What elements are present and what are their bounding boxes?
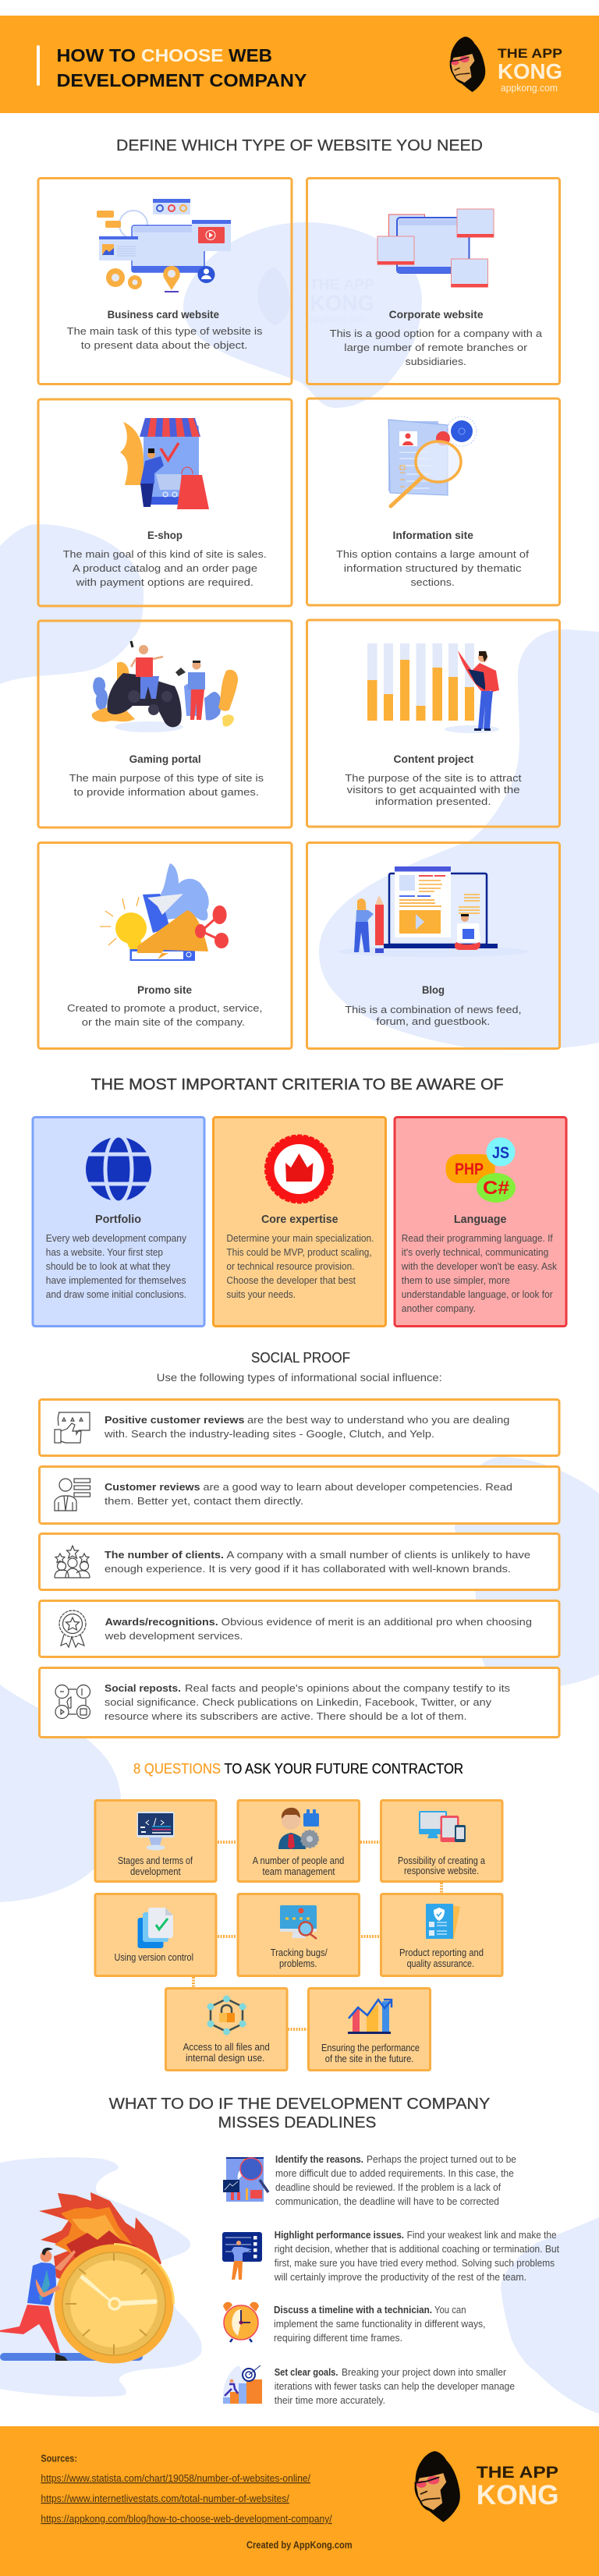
heading: criteria: THE MOST IMPORTANT CRITERIA TO BE AWARE OF (91, 1076, 504, 1093)
caption (398, 1855, 485, 1876)
panel: e-shop (38, 399, 292, 606)
heading: misses deadlines: MISSES DEADLINES (218, 2114, 376, 2131)
panel title: Portfolio (95, 1213, 141, 1226)
card body (69, 772, 264, 798)
card title: Information site (393, 529, 473, 541)
illustration: screens (377, 209, 494, 287)
caption: Using version control (114, 1952, 193, 1963)
card body (330, 328, 543, 367)
illustration: storefront phone (120, 418, 209, 510)
heading: 8 questions: TO ASK YOUR FUTURE CONTRACTOR (225, 1761, 463, 1777)
sources (41, 2454, 332, 2525)
panel body: Every web development company (46, 1232, 186, 1244)
icon: code monitor (137, 1812, 175, 1850)
title: WEB (229, 45, 272, 66)
social item: number of clients (39, 1533, 559, 1589)
text: A company with a small number of clients is unlikely to have (226, 1549, 530, 1561)
icon: language bubbles: PHP (455, 1160, 484, 1178)
panel body: it's overly technical, communicating (402, 1246, 548, 1258)
panel body: should be to look at what they (46, 1260, 171, 1272)
text: will certainly improve the productivity of the rest of the team. (274, 2271, 526, 2283)
text: with. Search the industry-leading sites - Google, Clutch, and Yelp. (104, 1428, 434, 1440)
card title: Business card website (108, 308, 219, 321)
footer band (0, 2426, 599, 2576)
social item: awards (39, 1600, 559, 1657)
text: their time more accurately. (275, 2394, 385, 2406)
question card: stages and terms (95, 1800, 216, 1881)
card body: large number of remote branches or (344, 342, 528, 353)
panel: information site (307, 399, 560, 605)
card body: sections. (410, 576, 455, 588)
social item: customer reviews (39, 1466, 559, 1524)
illustration: bar chart and man (367, 643, 499, 733)
text (274, 2229, 559, 2283)
card body: or the main site of the company. (82, 1016, 245, 1028)
panel body: This could be MVP, product scaling, (226, 1246, 372, 1258)
text: implement the same functionality in different ways, (274, 2318, 485, 2330)
text: are a good way to learn about developer competencies. Read (203, 1481, 512, 1493)
icon: monitor with magnifier (280, 1905, 317, 1939)
panel body: them to use simpler, more (402, 1274, 510, 1286)
text: Perhaps the project turned out to be (367, 2153, 516, 2165)
social item: positive reviews (39, 1399, 559, 1455)
illustration: gamers and controller (92, 641, 238, 732)
text (275, 2153, 516, 2207)
header band (0, 16, 599, 113)
card body: A product catalog and an order page (73, 562, 257, 574)
icon: devices (419, 1811, 466, 1842)
text: them. Better yet, contact them directly. (105, 1495, 303, 1507)
panel body: Determine your main specialization. (226, 1232, 374, 1244)
panel: gaming portal (38, 621, 292, 827)
panel: language (395, 1117, 566, 1326)
icon: language bubbles (446, 1137, 516, 1203)
card body: with payment options are required. (75, 576, 253, 588)
social item: social reposts (39, 1667, 559, 1738)
text: Social reposts. (105, 1682, 181, 1694)
card body: This is a good option for a company with a (330, 328, 543, 339)
title (56, 45, 307, 90)
text: Discuss a timeline with a technician. (274, 2304, 432, 2316)
text: Find your weakest link and make the (407, 2229, 557, 2241)
card title: E-shop (147, 529, 183, 541)
caption (399, 1947, 484, 1969)
caption: A number of people and (253, 1855, 344, 1866)
card body: This option contains a large amount of (336, 548, 529, 560)
icon: network lock (207, 1995, 246, 2036)
heading: define type: DEFINE WHICH TYPE OF WEBSITE YOU NEED (116, 137, 483, 154)
card body: to present data about the object. (81, 339, 247, 351)
caption: Tracking bugs/ (271, 1947, 328, 1958)
text: Highlight performance issues. (275, 2229, 404, 2241)
text: social significance. Check publications on Linkedin, Facebook, Twitter, or any (105, 1696, 492, 1708)
icon: social network (55, 1685, 90, 1719)
panel body: or technical resource provision. (226, 1260, 354, 1272)
panel: corporate website (307, 178, 560, 384)
card title: Corporate website (389, 308, 484, 321)
card body (345, 772, 522, 807)
card body: to provide information about games. (73, 786, 259, 798)
panel body (46, 1232, 186, 1300)
question card: reporting and QA (381, 1894, 502, 1976)
watermark logo: THE APP (310, 277, 374, 292)
text: Breaking your project down into smaller (342, 2366, 507, 2378)
icon: language bubbles: JS (492, 1144, 509, 1162)
card body: Created to promote a product, service, (67, 1002, 262, 1014)
icon: alarm clock (223, 2302, 259, 2342)
logo: The App Kong: appkong.com (501, 83, 558, 94)
card body: The main task of this type of website is (67, 325, 263, 337)
text: You can (434, 2304, 466, 2316)
caption: responsive website. (404, 1866, 479, 1876)
question card: responsive (381, 1800, 502, 1881)
tip: performance issues (222, 2229, 559, 2283)
card body (63, 548, 267, 588)
icon: task board (222, 2232, 262, 2280)
question card: tracking bugs (238, 1894, 359, 1976)
sources: https://www.statista.com/chart/19058/number-of-websites-online/ (41, 2473, 310, 2484)
icon: thumbs up with stars (55, 1412, 90, 1443)
panel body: has a website. Your first step (46, 1246, 163, 1258)
card body: forum, and guestbook. (376, 1015, 490, 1027)
watermark logo: appkong.com (310, 314, 367, 324)
connectors between question cards (193, 1842, 441, 2029)
card title: Promo site (137, 983, 192, 996)
icon: award rosette (59, 1610, 86, 1647)
card title: Gaming portal (129, 753, 201, 765)
panel body: with the developer won't be easy. Ask (401, 1260, 557, 1272)
caption: Possibility of creating a (398, 1855, 485, 1866)
logo: The App Kong: THE APP (498, 46, 562, 61)
icon: language bubbles: C# (483, 1178, 509, 1199)
sources: https://www.internetlivestats.com/total-number-of-websites/ (41, 2493, 289, 2504)
logo: The App Kong (449, 37, 562, 94)
text: resource where its subscribers are active. There should be a lot of them. (105, 1710, 466, 1722)
text: communication, the deadline will have to be corrected (275, 2195, 499, 2207)
logo: The App Kong: KONG (477, 2480, 559, 2510)
text: deadline should be reviewed. If the problem is a lack of (275, 2181, 501, 2193)
panel: content project (307, 620, 560, 827)
heading: misses deadlines: WHAT TO DO IF THE DEVELOPMENT COMPANY (109, 2096, 490, 2113)
sources: Sources: (41, 2454, 77, 2464)
illustration: laptop with blog page (338, 866, 529, 957)
icon: growth chart (348, 2000, 392, 2034)
panel: core expertise (214, 1117, 385, 1326)
card body: information presented. (375, 795, 491, 807)
caption: problems. (279, 1958, 317, 1969)
panel: blog (307, 842, 560, 1048)
caption: Access to all files and (183, 2042, 270, 2053)
card body: The main goal of this kind of site is sales. (63, 548, 267, 560)
illustration: website windows (97, 199, 231, 292)
icon: layered files (137, 1908, 173, 1948)
watermark logo (257, 268, 374, 325)
clock (55, 2245, 173, 2363)
text: iterations with fewer tasks can help the developer manage (275, 2380, 515, 2392)
card body: This is a combination of news feed, (345, 1004, 522, 1015)
caption: Ensuring the performance (321, 2043, 420, 2053)
text (274, 2304, 485, 2344)
panel body: and draw some initial conclusions. (46, 1288, 186, 1300)
text: requiring different time frames. (274, 2332, 402, 2344)
panel body: Read their programming language. If (402, 1232, 553, 1244)
question card: performance (309, 1989, 431, 2070)
text: enough experience. It is very good if it has collaborated with well-known brands. (105, 1563, 511, 1575)
text: Identify the reasons. (275, 2153, 363, 2165)
title: DEVELOPMENT COMPANY (56, 70, 307, 90)
card title: Content project (393, 753, 474, 765)
caption: quality assurance. (407, 1958, 474, 1969)
tip: clear goals (223, 2365, 515, 2406)
tip: timeline (223, 2302, 485, 2344)
caption: of the site in the future. (325, 2053, 413, 2064)
text (275, 2366, 515, 2406)
heading: social proof: SOCIAL PROOF (251, 1350, 350, 1366)
caption (183, 2042, 270, 2064)
panel body: suits your needs. (226, 1288, 296, 1300)
caption: Product reporting and (399, 1947, 484, 1958)
card body: subsidiaries. (406, 356, 466, 367)
panel body: Choose the developer that best (226, 1274, 356, 1286)
icon: report with shield (426, 1904, 460, 1939)
icon: crown badge (265, 1136, 332, 1203)
panel title: Language (454, 1213, 507, 1226)
question card: version control (95, 1894, 216, 1976)
icon: people with stars (55, 1546, 90, 1578)
icon: businessman with list (55, 1479, 90, 1511)
panel body (226, 1232, 374, 1300)
caption (321, 2043, 420, 2064)
caption: Stages and terms of (118, 1855, 193, 1866)
card body: The purpose of the site is to attract (345, 772, 522, 784)
card title: Blog (422, 983, 445, 996)
text (105, 1616, 532, 1642)
caption: team management (262, 1866, 335, 1877)
text (104, 1414, 509, 1440)
text: The number of clients. (105, 1549, 224, 1561)
text (105, 1682, 511, 1722)
text (105, 1481, 512, 1507)
text: Set clear goals. (275, 2366, 338, 2378)
panel body: understandable language, or look for (402, 1288, 553, 1300)
panel title: Core expertise (261, 1213, 338, 1226)
card body (336, 548, 529, 588)
credit: Created by AppKong.com (246, 2539, 353, 2550)
question card: people and team (238, 1800, 359, 1881)
tip: identify the reasons (223, 2153, 516, 2207)
icon: steps to target (223, 2365, 262, 2404)
panel body (401, 1232, 557, 1314)
text: web development services. (105, 1630, 243, 1642)
card body: The main purpose of this type of site is (69, 772, 264, 784)
panel: portfolio (33, 1117, 204, 1326)
card body (67, 325, 263, 351)
caption: internal design use. (186, 2053, 264, 2064)
card body (345, 1004, 522, 1027)
text: Customer reviews (105, 1481, 200, 1493)
icon: manager with gear (278, 1808, 319, 1849)
title: HOW TO (56, 45, 136, 66)
running man (0, 2248, 76, 2361)
sources: https://appkong.com/blog/how-to-choose-web-development-company/ (41, 2514, 332, 2525)
card body: information structured by thematic (344, 562, 522, 574)
panel body: another company. (402, 1302, 476, 1314)
illustration: man pushing clock on fire (0, 2192, 173, 2363)
caption (253, 1855, 344, 1877)
watermark logo: KONG (310, 291, 374, 315)
subheading: Use the following types of informational social influence: (157, 1371, 442, 1384)
card body: visitors to get acquainted with the (347, 784, 520, 795)
text: Real facts and people's opinions about the company testify to its (185, 1682, 511, 1694)
heading: 8 questions: 8 QUESTIONS (133, 1761, 221, 1777)
caption: development (130, 1866, 181, 1877)
icon: analysis (223, 2157, 268, 2202)
text: right decision, whether that is additional coaching or termination. But (275, 2243, 559, 2255)
logo: The App Kong: THE APP (477, 2464, 558, 2482)
text: are the best way to understand who you are dealing (247, 1414, 509, 1426)
title: CHOOSE (141, 45, 223, 66)
caption (118, 1855, 193, 1877)
flames (39, 2192, 161, 2304)
illustration: thumbs up, bulb, megaphone (100, 863, 229, 961)
heading: misses deadlines (109, 2096, 490, 2131)
logo: The App Kong (414, 2451, 559, 2522)
caption (271, 1947, 328, 1969)
logo: The App Kong: KONG (498, 59, 562, 83)
card body (67, 1002, 262, 1028)
text: Positive customer reviews (105, 1414, 245, 1426)
panel: promo site (38, 842, 292, 1048)
text: Obvious evidence of merit is an additional pro when choosing (222, 1616, 532, 1628)
text: first, make sure you have tried every method. Solving such problems (275, 2257, 555, 2269)
panel: business card website (38, 178, 292, 384)
icon: globe (84, 1136, 153, 1203)
text (105, 1549, 530, 1575)
illustration: magnifier over documents (388, 416, 477, 506)
panel body: have implemented for themselves (46, 1274, 186, 1286)
question card: access to files (165, 1989, 287, 2070)
heading: 8 questions (133, 1761, 463, 1777)
text: Awards/recognitions. (105, 1616, 218, 1628)
text: more difficult due to added requirements. In this case, the (275, 2167, 514, 2179)
